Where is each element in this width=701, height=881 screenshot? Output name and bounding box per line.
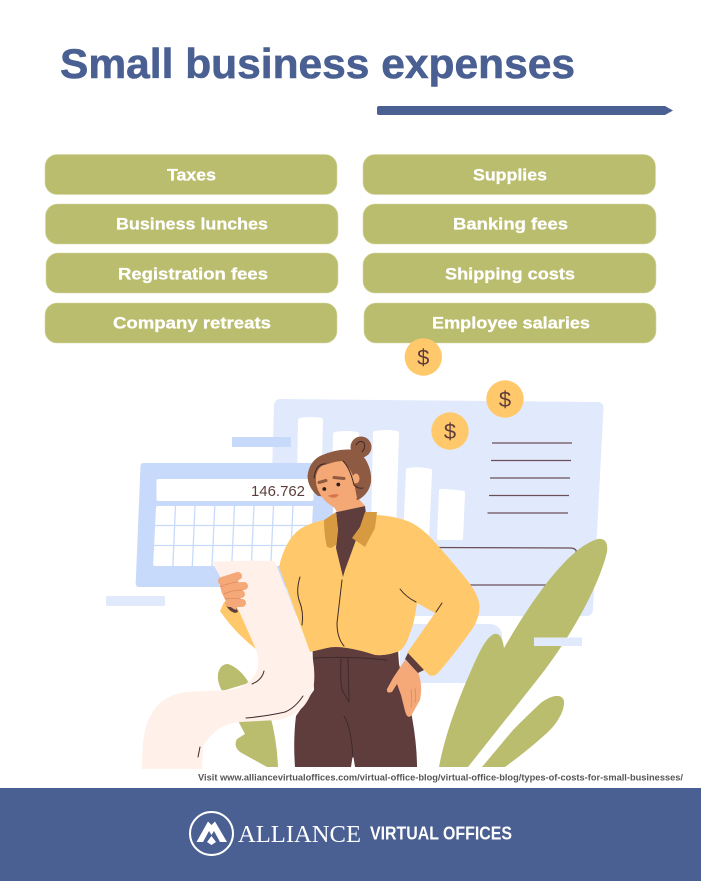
item: Banking fees: Banking fees: [453, 214, 568, 234]
keypad: [153, 506, 313, 566]
item: Employee salaries: [364, 303, 656, 343]
item: Banking fees: [363, 204, 656, 244]
collar: [324, 512, 377, 548]
calculator: [136, 463, 335, 587]
left cuff: [225, 600, 238, 613]
woman: [142, 436, 480, 769]
coin: [431, 412, 469, 450]
back sleeve: [220, 598, 270, 649]
calculator display: [156, 479, 314, 501]
left plant: [218, 664, 278, 767]
expense list: [45, 154, 656, 343]
left hand: [220, 576, 244, 610]
item: Shipping costs: [363, 253, 656, 293]
item: Business lunches: [46, 204, 338, 244]
footer band: [0, 788, 701, 881]
item: Registration fees: Registration fees: [118, 264, 268, 284]
small bar: left: [106, 596, 165, 606]
chart panel: [268, 399, 604, 616]
source link: Visit www.alliancevirtualoffices.com/virtual-office-blog/virtual-office-blog/types-of-costs-for-small-businesses/: [198, 772, 683, 784]
logo wordmark: ALLIANCE: [238, 822, 361, 848]
item: Business lunches: Business lunches: [116, 214, 268, 234]
ear: [352, 474, 360, 484]
right cuff: [405, 653, 424, 673]
small bar: over plant: [534, 638, 582, 646]
bars: [296, 417, 465, 540]
hair bun: [350, 436, 372, 458]
item: Supplies: [363, 154, 656, 194]
eyebrows: [319, 478, 344, 482]
jacket fold lines: [298, 577, 442, 646]
right hand: [387, 660, 421, 717]
item: Employee salaries: Employee salaries: [432, 314, 590, 332]
eyes: [322, 487, 326, 491]
second panel: [400, 624, 502, 683]
coin: [405, 338, 442, 376]
display number: 146.762: [251, 483, 305, 500]
face: [316, 461, 357, 509]
item: Registration fees: [46, 253, 338, 293]
paper receipt: [142, 561, 314, 769]
logo tagline: VIRTUAL OFFICES: [370, 824, 512, 844]
item: Supplies: Supplies: [473, 166, 547, 184]
neck: [332, 498, 365, 512]
turtleneck: [336, 506, 366, 577]
hair: [308, 449, 371, 500]
item: Taxes: [45, 154, 337, 194]
small bar: top: [232, 437, 291, 447]
right plant: [439, 539, 607, 767]
coin: $: [499, 387, 511, 412]
trouser seams: [314, 657, 387, 757]
title: Small business expenses: [60, 40, 575, 87]
head: [308, 436, 372, 512]
hair strands: [314, 461, 363, 488]
text lines: [430, 443, 576, 585]
item: Company retreats: Company retreats: [113, 314, 271, 332]
logo: [190, 812, 512, 855]
mouth: [329, 495, 338, 497]
trousers: [294, 636, 417, 767]
paper fold lines: [252, 671, 264, 684]
coin: $: [444, 419, 456, 444]
item: Taxes: Taxes: [167, 166, 216, 184]
item: Company retreats: [45, 303, 337, 343]
logo mark: [190, 812, 233, 855]
coin: $: [417, 345, 429, 370]
jacket: [279, 515, 480, 676]
illustration: [106, 338, 607, 769]
coin: [486, 380, 524, 418]
title arrow bar: [377, 106, 673, 115]
item: Shipping costs: Shipping costs: [445, 264, 575, 284]
